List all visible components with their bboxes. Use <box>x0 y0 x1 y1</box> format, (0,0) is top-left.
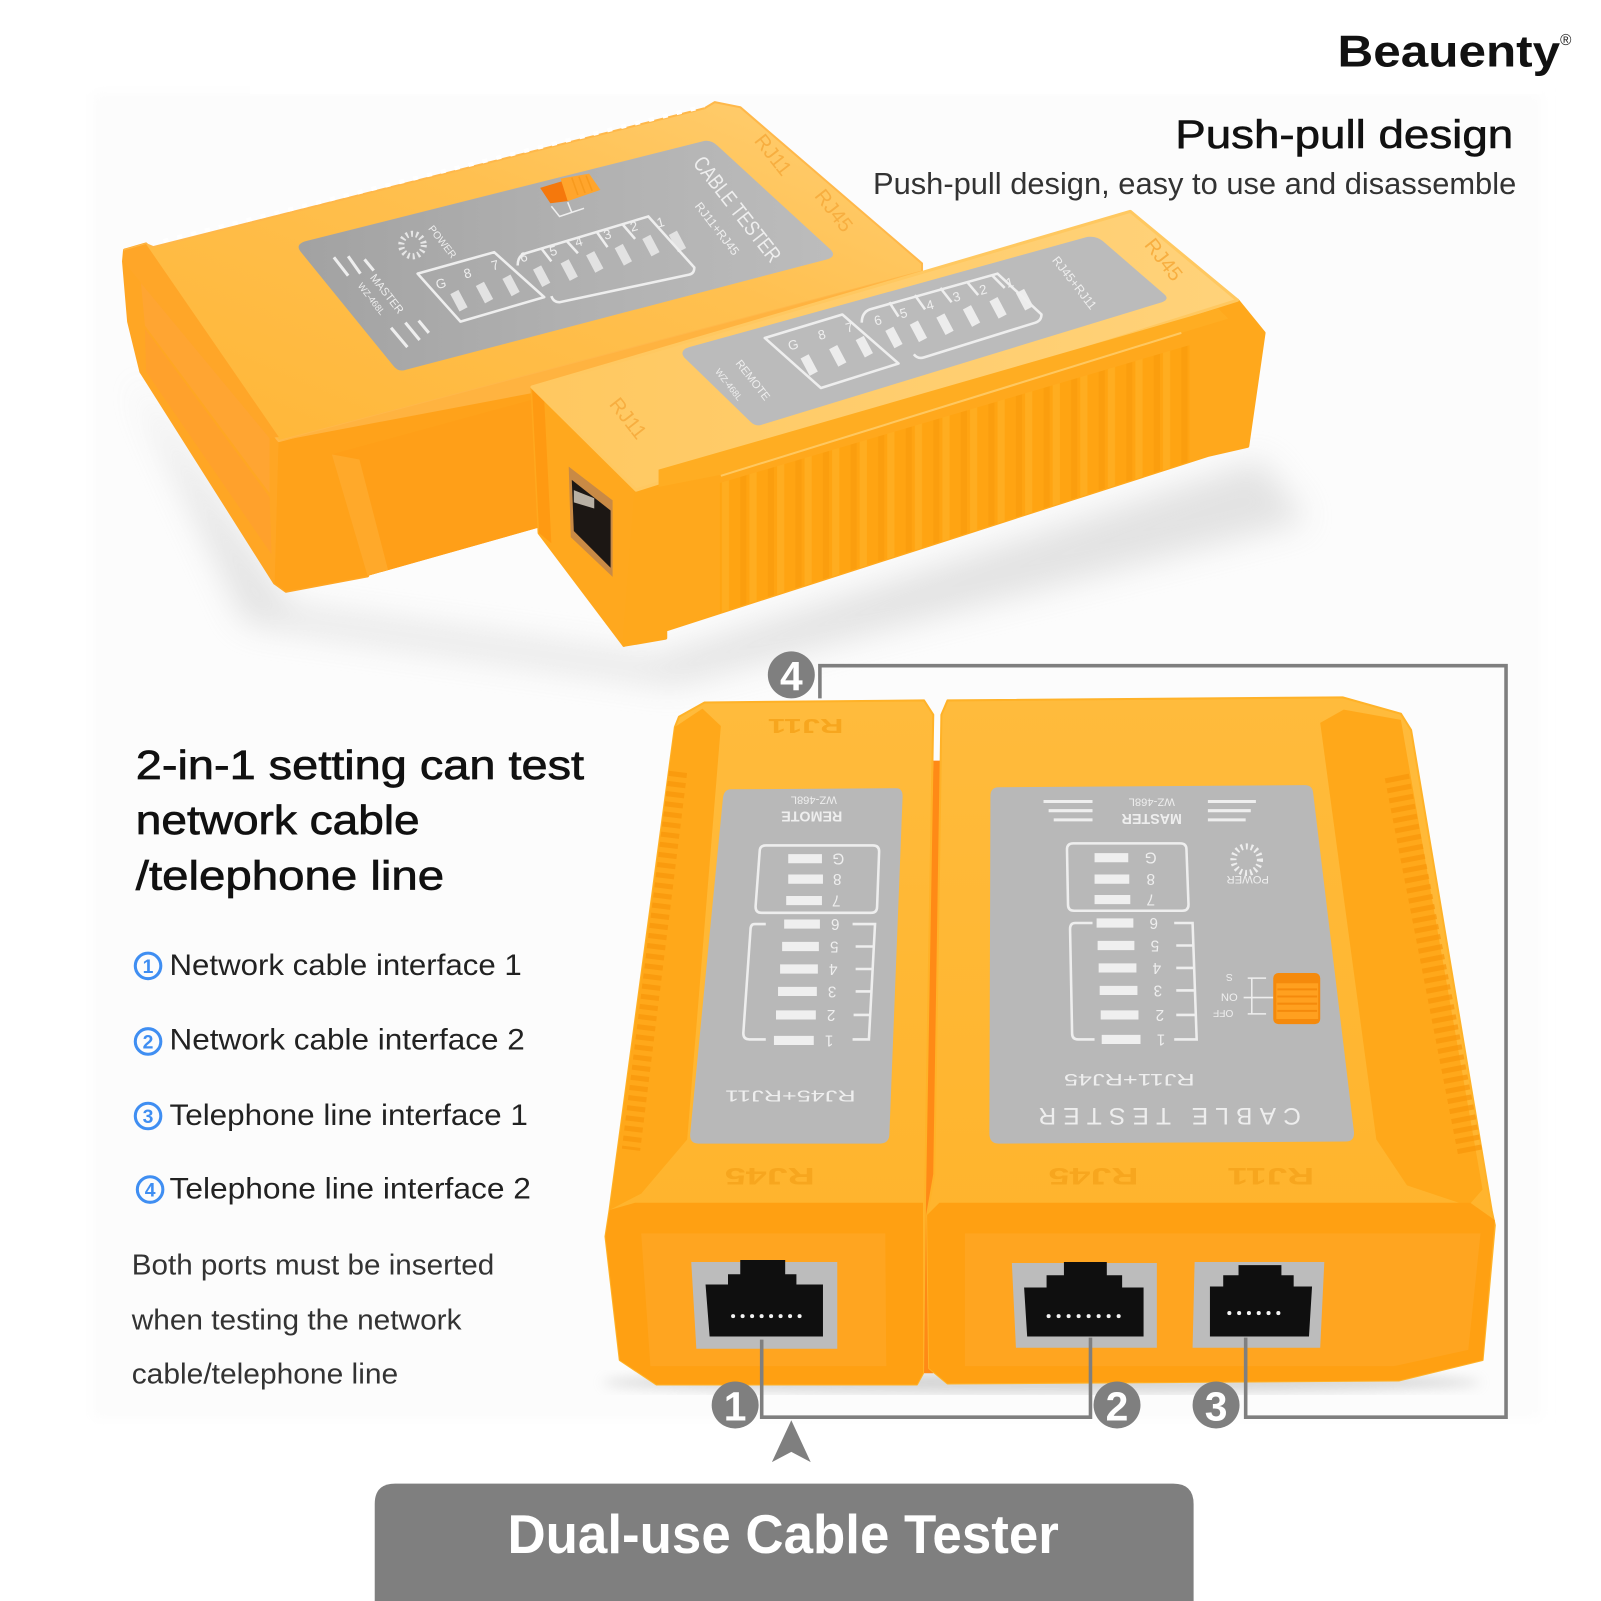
embossed port names: RJ11 <box>768 714 843 736</box>
digits: 6 <box>518 249 529 265</box>
digits: 3 <box>602 226 613 243</box>
digits: 4 <box>925 297 936 313</box>
digits and labels: S <box>1226 971 1233 982</box>
digits: 2 <box>978 282 989 298</box>
digits: G <box>832 850 844 867</box>
logo: ® <box>1560 32 1572 49</box>
photo: master unit angled <box>124 102 922 591</box>
item 3: Telephone line interface 1 <box>169 1099 528 1132</box>
digits and labels: RJ11+RJ45 <box>1064 1070 1195 1088</box>
note text: when testing the network <box>131 1304 462 1336</box>
photo: master unit angled: RJ11+RJ45 <box>692 199 742 258</box>
photo: remote unit angled: REMOTE <box>733 358 772 403</box>
background <box>92 92 1542 1419</box>
front face <box>605 1203 923 1385</box>
top white band <box>250 0 1542 94</box>
port 3 <box>1193 1262 1324 1348</box>
label plate <box>989 785 1354 1144</box>
heading: 2-in-1: 2-in-1 setting can test <box>136 742 585 788</box>
side channel <box>1320 710 1483 1206</box>
photo: remote unit angled: RJ11 <box>605 394 650 444</box>
ridge band <box>720 345 1190 613</box>
digits: G <box>434 275 448 292</box>
end face <box>532 387 636 645</box>
digits: 8 <box>816 326 827 343</box>
digits: 6 <box>872 312 883 329</box>
heading: 2-in-1: network cable <box>136 797 420 843</box>
digits: 1 <box>1004 274 1015 291</box>
note text: cable/telephone line <box>132 1359 398 1391</box>
digits and labels: 8 <box>1146 870 1155 887</box>
digits: 5 <box>548 243 559 259</box>
LED outlines <box>765 314 899 388</box>
LED bars <box>805 291 1029 374</box>
ridges <box>1397 776 1470 1154</box>
LED bars <box>454 233 682 309</box>
LED outlines <box>418 252 544 322</box>
digits: 4 <box>828 960 837 977</box>
plate text: CABLE TESTER <box>688 152 786 267</box>
LED bars <box>1095 858 1141 1039</box>
digits: 8 <box>833 870 842 887</box>
photo: master unit angled: RJ45 <box>810 186 857 237</box>
digits <box>434 214 666 292</box>
digits and labels: CABLE TESTER <box>1038 1102 1301 1129</box>
sun icon <box>401 234 424 256</box>
LED bars <box>774 859 823 1040</box>
item 1: 1 <box>143 956 154 978</box>
digits: 3 <box>951 289 962 305</box>
photo: master unit angled: POWER <box>425 224 458 261</box>
slide switch <box>1273 973 1320 1024</box>
item 2: 2 <box>143 1032 153 1054</box>
ridges <box>631 772 678 1150</box>
embossed port names: RJ45 <box>1049 1162 1138 1189</box>
side channel <box>610 709 721 1210</box>
side face <box>624 300 1264 645</box>
sun icon <box>1233 846 1260 873</box>
port 2 <box>1012 1262 1157 1348</box>
raised side panel <box>332 399 541 576</box>
photo: master unit front <box>927 697 1495 1384</box>
digits: 1 <box>655 214 666 231</box>
label plate <box>682 237 1167 425</box>
digits and labels: ON <box>1221 990 1238 1002</box>
embossed port names: RJ11 <box>1227 1162 1314 1189</box>
switch marks <box>1244 978 1273 1014</box>
marker 3: 3 <box>1205 1383 1227 1429</box>
embossed port names <box>1049 1162 1314 1189</box>
item 3: 3 <box>143 1106 154 1128</box>
digits: 5 <box>898 305 909 321</box>
embossed port names: RJ45 <box>725 1162 815 1189</box>
photo: remote unit angled <box>532 211 1264 645</box>
digits and labels: 3 <box>1154 981 1162 998</box>
digits: 7 <box>832 891 840 908</box>
stripes <box>1044 802 1256 820</box>
digits: 3 <box>828 982 836 999</box>
digits: 6 <box>831 915 839 932</box>
list of interfaces <box>135 949 531 1206</box>
top face <box>125 102 922 441</box>
embossed port names <box>725 714 843 1189</box>
marker 2: 2 <box>1106 1383 1128 1429</box>
heading: push-pull design: Push-pull design <box>1175 113 1513 157</box>
photo: remote unit angled: WZ-468L <box>713 367 744 403</box>
note text: Both ports must be inserted <box>132 1249 494 1281</box>
left end face <box>124 244 368 591</box>
digits: 8 <box>462 265 473 282</box>
text: push-pull description: Push-pull design, easy to use and disassemble <box>873 167 1516 201</box>
digits: 2 <box>628 218 639 235</box>
digits: WZ-468L <box>791 793 837 805</box>
marker 3 <box>1193 1381 1240 1429</box>
digits <box>786 274 1015 353</box>
digits and labels: POWER <box>1227 873 1269 885</box>
gap between front units <box>923 761 943 1373</box>
digits and labels: 7 <box>1146 890 1155 907</box>
digits: 4 <box>573 234 584 250</box>
top face <box>532 211 1238 490</box>
digits: RJ45+RJ11 <box>725 1086 856 1103</box>
digits and labels: MASTER <box>1121 810 1182 826</box>
digits and labels: 1 <box>1157 1030 1165 1047</box>
marker 1 <box>712 1381 759 1429</box>
digits and labels: 5 <box>1151 936 1159 953</box>
lower bevel of top face <box>279 272 922 441</box>
serrated edge <box>163 106 705 241</box>
digits: 2 <box>827 1006 835 1023</box>
digits and labels: 4 <box>1152 959 1161 976</box>
marker 4: 4 <box>780 653 803 699</box>
banner: Dual-use Cable Tester <box>507 1503 1059 1565</box>
digits: REMOTE <box>781 808 842 824</box>
photo: master unit angled: WZ-468L <box>356 281 387 317</box>
port <box>569 467 613 577</box>
digits: 1 <box>825 1031 833 1048</box>
digits: 7 <box>490 257 501 273</box>
switch marks <box>551 202 584 216</box>
marker 2 <box>1094 1381 1141 1429</box>
arrow <box>772 1420 811 1462</box>
digits and labels: G <box>1145 849 1157 866</box>
label plate <box>299 141 833 371</box>
photo: remote unit front <box>605 700 933 1385</box>
photo: master unit angled: MASTER <box>367 272 405 316</box>
marker 1: 1 <box>724 1383 747 1429</box>
digits and labels: OFF <box>1213 1007 1233 1018</box>
LED outlines <box>1067 843 1188 911</box>
callout lines <box>762 666 1506 1417</box>
digits and labels: 6 <box>1150 914 1158 931</box>
plate text: RJ45+RJ11 <box>1049 254 1100 312</box>
front face <box>275 368 541 591</box>
label plate <box>690 788 903 1144</box>
digits <box>725 793 856 1103</box>
heading: 2-in-1: /telephone line <box>136 852 444 898</box>
item 2: Network cable interface 2 <box>169 1024 525 1057</box>
shadow under lower devices <box>602 1372 1481 1393</box>
front face <box>927 1203 1495 1384</box>
item 4: 4 <box>145 1180 156 1202</box>
embossed port names: RJ45 <box>1140 235 1186 286</box>
port 1 <box>691 1260 837 1349</box>
item 4: Telephone line interface 2 <box>169 1173 531 1206</box>
digits: G <box>786 336 800 353</box>
slide switch <box>540 181 568 203</box>
digits and labels: 2 <box>1156 1006 1164 1023</box>
digits: 5 <box>830 937 838 954</box>
note text <box>131 1249 494 1391</box>
stripes <box>334 256 429 347</box>
marker 4 <box>768 651 815 699</box>
digits and labels: WZ-468L <box>1129 795 1175 807</box>
LED outlines <box>756 845 879 913</box>
heading: 2-in-1 <box>136 742 585 898</box>
logo: Beauenty <box>1338 25 1560 76</box>
item 1: Network cable interface 1 <box>169 949 522 982</box>
digits: 7 <box>844 319 855 336</box>
shadow under top devices <box>133 378 1307 684</box>
embossed port names: RJ11 <box>750 130 795 180</box>
banner <box>375 1484 1194 1601</box>
digits and labels <box>1038 795 1301 1129</box>
side highlight <box>659 308 1228 487</box>
